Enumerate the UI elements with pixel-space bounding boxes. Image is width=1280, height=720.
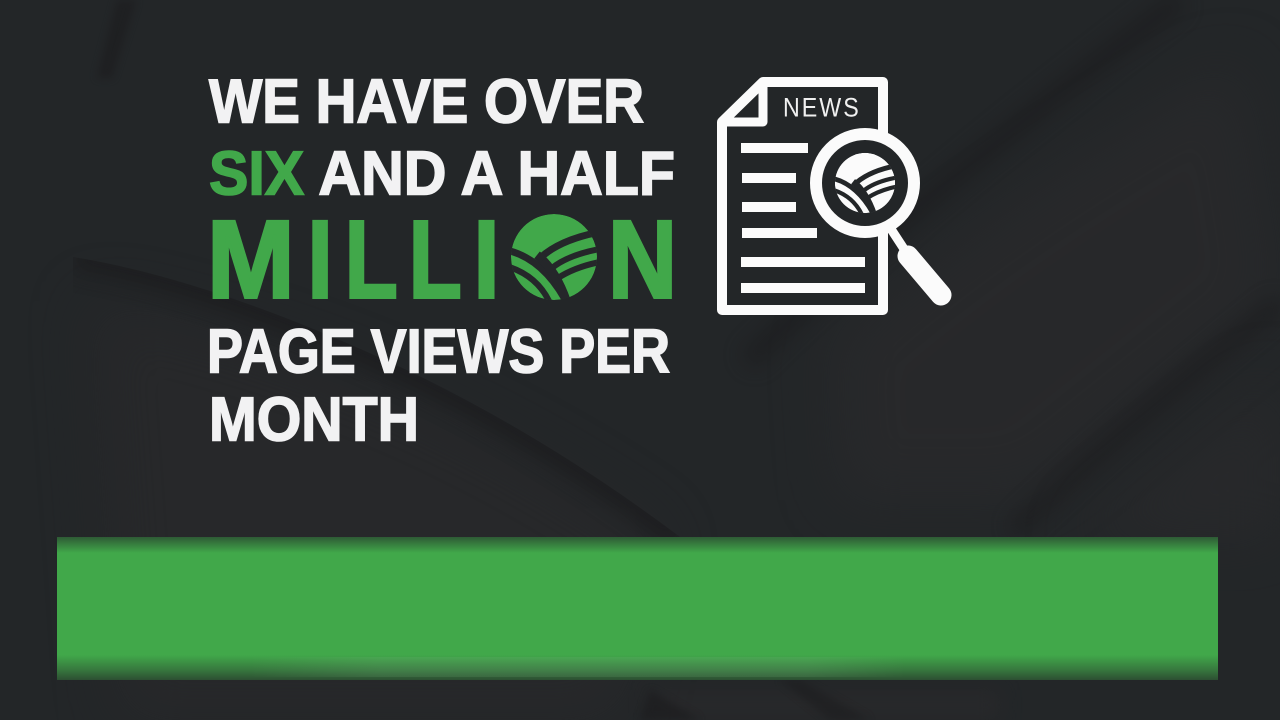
- heading word: MILLION: I: [308, 198, 333, 322]
- heading word: MILLION: I: [474, 198, 500, 322]
- heading: we have over six and a half million page views per month: [207, 68, 677, 454]
- green banner: [57, 537, 1218, 680]
- heading line: SIX AND A HALF: SIX AND A HALF: [209, 140, 675, 208]
- heading line: WE HAVE OVER: WE HAVE OVER: [209, 68, 644, 136]
- icon: document outline: [722, 82, 883, 310]
- background: layered dark leaf shadows: [511, 94, 952, 296]
- icon: farm logo in the lens: [835, 152, 895, 214]
- label: NEWS: NEWS: [783, 93, 859, 123]
- heading line: MONTH: MONTH: [209, 386, 419, 454]
- heading word: MILLION: L: [345, 198, 398, 322]
- icon: farm logo as the letter O: [511, 214, 597, 300]
- icon: magnifier lens: [816, 134, 914, 232]
- heading word: MILLION: L: [409, 198, 462, 322]
- heading word: MILLION: [207, 198, 677, 322]
- heading line: PAGE VIEWS PER: PAGE VIEWS PER: [207, 318, 670, 386]
- icon: folded corner: [722, 82, 763, 122]
- heading word: MILLION: N: [608, 198, 677, 322]
- heading word: MILLION: M: [207, 198, 295, 322]
- text lines on the document: [741, 143, 865, 293]
- icon: newspaper with magnifying glass: [722, 82, 941, 310]
- icon: magnifier handle: [889, 226, 941, 295]
